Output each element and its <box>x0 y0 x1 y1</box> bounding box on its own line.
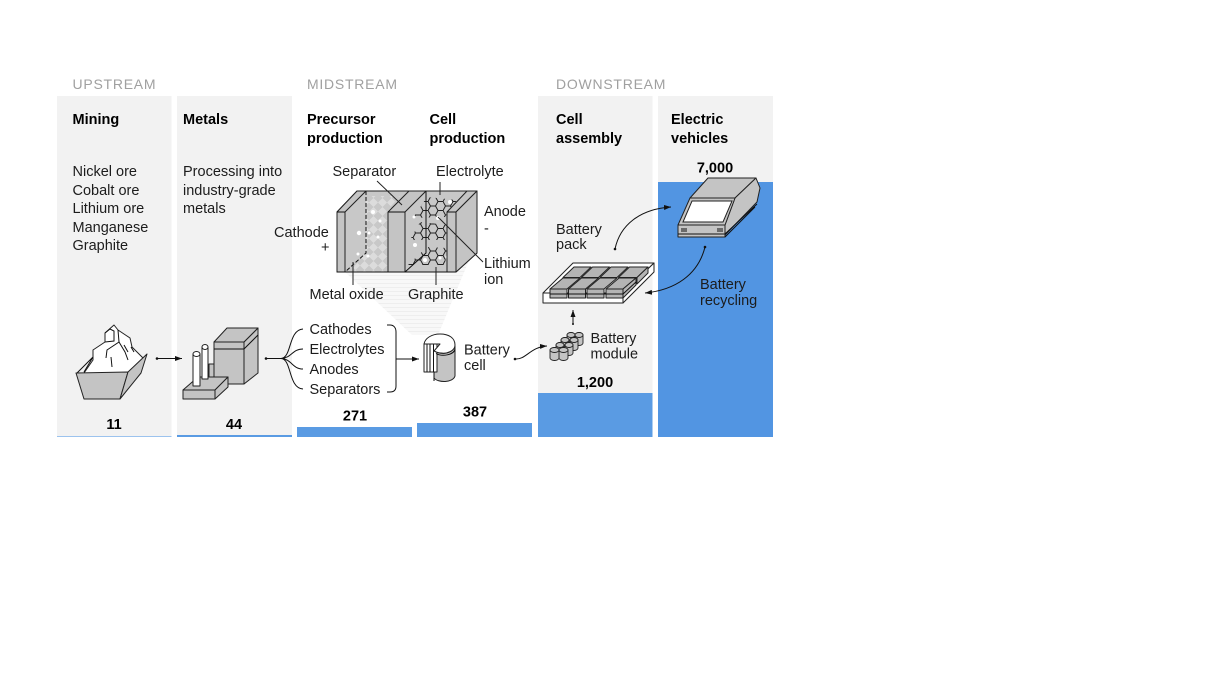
heading: cell assembly <box>556 112 622 147</box>
text: processing: Processing into <box>183 164 282 180</box>
label: battery recycling: recycling <box>700 293 757 309</box>
cell labels: Lithium <box>484 256 531 272</box>
value: 44: 44 <box>226 417 242 433</box>
icon: ore cart <box>76 325 147 399</box>
list: ores: Cobalt ore <box>72 183 139 199</box>
value: 387: 387 <box>463 404 487 420</box>
bar: precursor value <box>297 427 412 437</box>
label: battery pack: Battery <box>556 222 603 238</box>
list: components <box>310 322 384 398</box>
icon: battery cell <box>424 334 455 382</box>
heading: upstream: UPSTREAM <box>72 76 156 92</box>
diagram: lithium-ion cell <box>274 164 531 303</box>
graphite lattice <box>408 197 457 265</box>
panel: metals <box>177 96 292 437</box>
heading: mining: Mining <box>72 112 119 128</box>
heading: electric vehicles <box>671 112 728 147</box>
heading: electric vehicles: Electric <box>671 112 723 128</box>
bar: mining value <box>57 436 172 437</box>
heading: cell production: Cell <box>430 112 456 128</box>
back row modules <box>563 267 648 284</box>
arrow: pack to vehicle <box>614 207 671 250</box>
cell labels <box>274 164 531 303</box>
cell labels: Cathode <box>274 225 329 241</box>
cell labels: - <box>484 221 489 237</box>
value: 1,200: 1,200 <box>577 375 613 391</box>
cell labels: Metal oxide <box>310 287 384 303</box>
heading: precursor production <box>307 112 383 147</box>
heading: metals: Metals <box>183 112 228 128</box>
cell labels: Graphite <box>408 287 464 303</box>
heading: midstream: MIDSTREAM <box>307 76 398 92</box>
zoom cone from cell to diagram <box>345 258 470 335</box>
list: ores: Manganese <box>72 220 148 236</box>
value: 271: 271 <box>343 408 367 424</box>
heading: downstream: DOWNSTREAM <box>556 76 666 92</box>
cell labels: Separator <box>332 164 396 180</box>
cathode and anode plates <box>337 191 366 272</box>
label: battery pack: pack <box>556 237 587 253</box>
panel: electric vehicles <box>658 96 773 437</box>
panel: cell assembly <box>538 96 654 437</box>
front row modules <box>550 278 636 298</box>
arrow: cell to module <box>514 346 547 360</box>
heading: cell production <box>430 112 505 147</box>
heading: cell assembly: Cell <box>556 112 583 128</box>
arrow: module to pack <box>572 310 574 325</box>
text: processing: industry-grade <box>183 183 276 199</box>
lithium ions <box>356 200 452 262</box>
heading: electric vehicles: vehicles <box>671 131 728 147</box>
label: battery module <box>590 331 638 362</box>
icon: factory <box>183 328 258 399</box>
label: battery module: module <box>590 346 638 362</box>
icon: battery module <box>550 332 583 360</box>
heading: precursor production: Precursor <box>307 112 376 128</box>
cell labels: Electrolyte <box>436 164 504 180</box>
list: components: Cathodes <box>310 322 372 338</box>
icon: battery pack <box>543 263 654 303</box>
list: ores: Lithium ore <box>72 201 144 217</box>
list: ores: Nickel ore <box>72 164 137 180</box>
cell labels: + <box>321 240 329 256</box>
label: battery module: Battery <box>590 331 637 347</box>
list: ores: Graphite <box>72 238 128 254</box>
cell labels: Anode <box>484 204 526 220</box>
label: battery recycling: Battery <box>700 277 747 293</box>
heading: cell production: production <box>430 131 505 147</box>
label: battery cell: cell <box>464 358 486 374</box>
label lines <box>353 181 483 285</box>
text: processing <box>183 164 282 217</box>
text: processing: metals <box>183 201 226 217</box>
arrows: metals to components <box>265 329 303 389</box>
bar: electric vehicles value <box>658 182 773 437</box>
metal oxide pattern <box>350 196 400 272</box>
label: battery cell <box>464 342 511 374</box>
arrow: mining to metals <box>156 357 182 360</box>
label: battery cell: Battery <box>464 342 511 358</box>
value: 11: 11 <box>106 417 122 433</box>
icon: electric vehicle <box>678 178 760 237</box>
panel: mining <box>57 96 172 437</box>
bar: cell assembly value <box>538 393 652 437</box>
bracket and arrow to cell <box>387 325 419 392</box>
separator <box>388 191 426 272</box>
label: battery pack <box>556 222 603 253</box>
label: battery recycling <box>700 277 757 309</box>
list: ores <box>72 164 148 254</box>
cell labels: ion <box>484 272 503 288</box>
list: components: Anodes <box>310 362 359 378</box>
list: components: Separators <box>310 382 380 398</box>
heading: precursor production: production <box>307 131 383 147</box>
list: components: Electrolytes <box>310 342 384 358</box>
arrow: vehicle recycling to pack <box>645 246 706 293</box>
bar: cell production value <box>417 423 532 437</box>
bar: metals value <box>177 435 292 437</box>
value: 7,000: 7,000 <box>697 160 733 176</box>
heading: cell assembly: assembly <box>556 131 622 147</box>
